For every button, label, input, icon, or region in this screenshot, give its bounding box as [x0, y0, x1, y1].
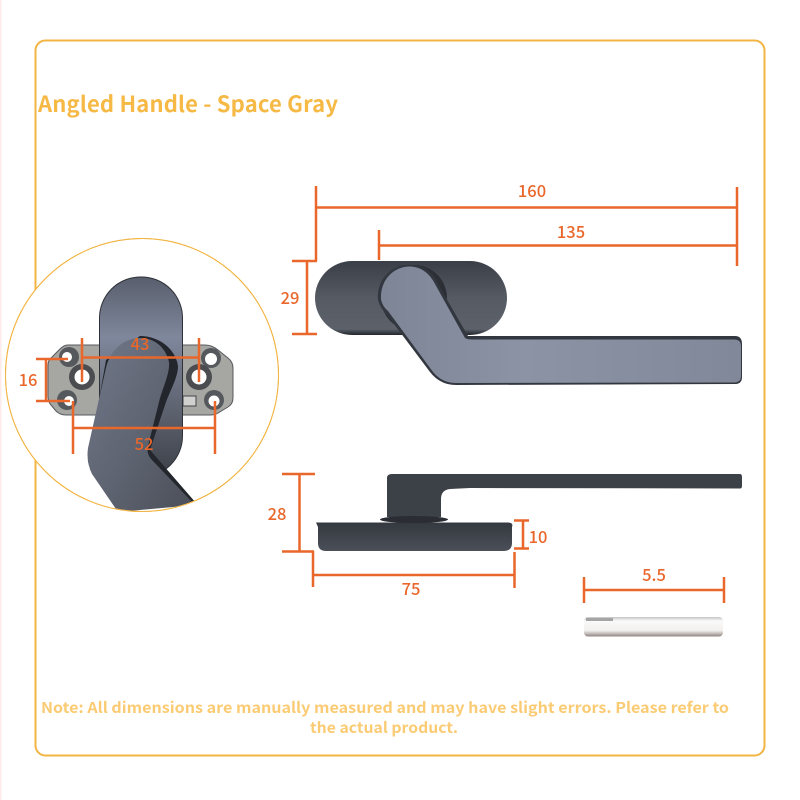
- dimension 16: 16: [19, 367, 37, 391]
- dimension 16: [19, 359, 70, 401]
- lever: [381, 266, 741, 383]
- dimension 5.5: [584, 562, 724, 603]
- lever shadow: [378, 265, 742, 385]
- top view: handle photo: [315, 261, 742, 385]
- backplate: [100, 277, 182, 477]
- dimension 52: [73, 401, 215, 455]
- dimension 160: [316, 178, 737, 266]
- mounting plate: [48, 345, 233, 415]
- collar behind lever: [381, 265, 447, 331]
- lever: [88, 338, 195, 512]
- circle outline: [6, 238, 278, 512]
- side view: handle photo: [316, 474, 742, 551]
- lever shadow: [88, 336, 196, 510]
- dimension 75: [313, 551, 514, 600]
- dimension 29: 29: [281, 285, 299, 309]
- dimension 10: 10: [529, 524, 547, 548]
- dimension 5.5: 5.5: [642, 562, 666, 586]
- dimension 28: [268, 474, 315, 552]
- dimension 160: 160: [518, 178, 546, 202]
- mounting holes: [59, 347, 79, 367]
- collar: [380, 516, 448, 523]
- page edge tint: [0, 0, 2, 800]
- neck and arm: [387, 474, 742, 517]
- note: Note: All dimensions are manually measured and may have slight errors. Please refer to: [41, 697, 729, 718]
- detail circle: [6, 238, 278, 512]
- note: [41, 697, 729, 738]
- dimension 135: 135: [557, 219, 585, 243]
- dimension 75: 75: [402, 576, 420, 600]
- dimension 43: [82, 331, 199, 382]
- title: Angled Handle - Space Gray: [37, 87, 338, 119]
- base: [316, 522, 512, 551]
- dimension 135: [379, 219, 737, 260]
- dimension 29: [281, 261, 317, 334]
- dimension 28: 28: [268, 501, 286, 525]
- backplate oval: [315, 261, 507, 335]
- dimension 43: 43: [131, 331, 149, 355]
- dimension 10: [514, 520, 547, 549]
- spindle pin: [584, 617, 723, 636]
- dimension 52: 52: [135, 431, 153, 455]
- note: the actual product.: [310, 717, 458, 738]
